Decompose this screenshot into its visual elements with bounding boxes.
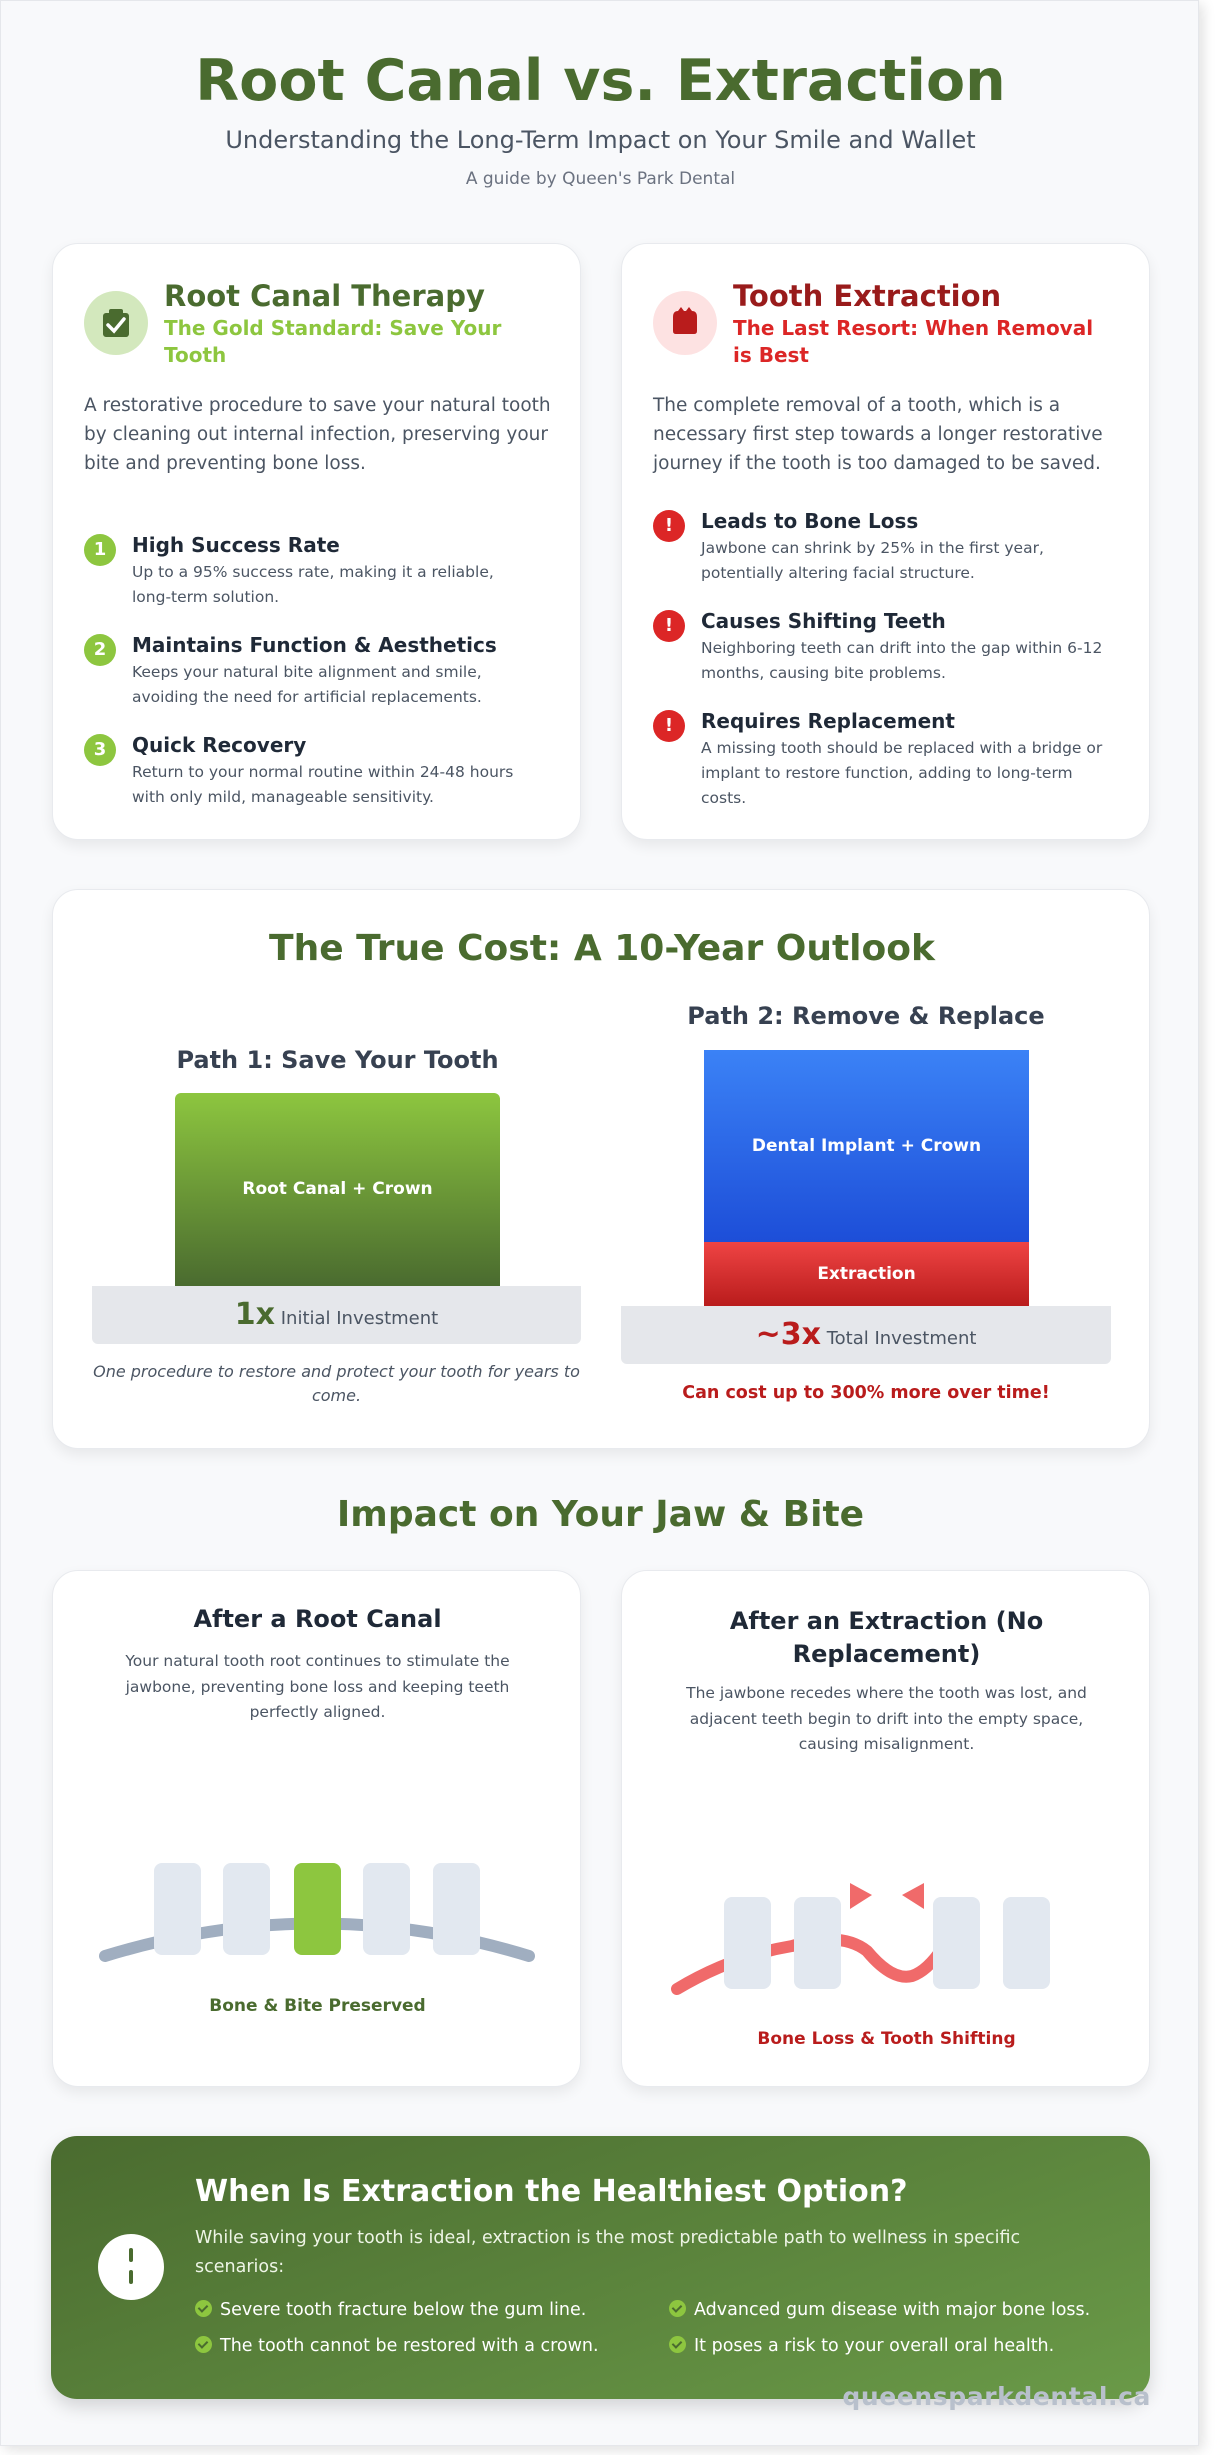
panel: after extraction <box>621 1570 1150 2087</box>
heading: Root Canal Therapy <box>164 279 485 313</box>
panel: root canal therapy <box>52 243 581 840</box>
checklist: Severe tooth fracture below the gum line. <box>220 2300 586 2320</box>
heading: Tooth <box>164 343 226 367</box>
base: 1x: 1x Initial Investment <box>235 1297 438 1332</box>
item 3 <box>653 709 1102 807</box>
path 2 title: Path 2: Remove & Replace <box>687 1002 1045 1030</box>
icon: alert <box>98 2234 164 2300</box>
bar: root canal + crown <box>175 1093 500 1286</box>
description: The complete removal of a tooth, which is a necessary first step towards a longer restorative journey if the tooth is too damaged to be saved. <box>653 395 1103 474</box>
risks list <box>653 509 1102 807</box>
panel: cost outlook <box>52 889 1150 1449</box>
heading: impact: Impact on Your Jaw & Bite <box>337 1494 864 1535</box>
checklist <box>195 2300 1090 2356</box>
item 3 <box>84 733 513 806</box>
base: 1x <box>92 1286 581 1344</box>
heading: Tooth Extraction <box>733 279 1001 313</box>
heading <box>733 279 1093 367</box>
heading: The True Cost: A 10-Year Outlook <box>269 928 935 969</box>
item 1: Jawbone can shrink by 25% in the first year, potentially altering facial structure. <box>701 539 1044 582</box>
text: While saving your tooth is ideal, extraction is the most predictable path to wellness in specific scenarios: <box>195 2228 1020 2277</box>
heading: Replacement) <box>793 1640 980 1668</box>
byline: A guide by Queen's Park Dental <box>466 169 735 189</box>
bar: root canal + crown: Root Canal + Crown <box>242 1179 433 1199</box>
title: Root Canal vs. Extraction <box>195 48 1006 114</box>
watermark: queensparkdental.ca <box>842 2382 1151 2411</box>
item 3: Return to your normal routine within 24-48 hours with only mild, manageable sensitivity. <box>132 763 513 806</box>
heading: When Is Extraction the Healthiest Option? <box>195 2174 908 2209</box>
item 1: Up to a 95% success rate, making it a reliable, long-term solution. <box>132 563 494 606</box>
item 1: 1 <box>94 539 106 560</box>
item 2: Neighboring teeth can drift into the gap within 6-12 months, causing bite problems. <box>701 639 1102 682</box>
item 2: 2 <box>94 639 106 660</box>
checklist: Advanced gum disease with major bone loss. <box>694 2300 1090 2320</box>
panel: when extraction is healthiest <box>51 2136 1150 2399</box>
checklist: The tooth cannot be restored with a crown. <box>220 2336 599 2356</box>
item 2 <box>653 609 1102 682</box>
label: Bone & Bite Preserved <box>209 1996 426 2016</box>
heading <box>730 1607 1043 1668</box>
item 2: ! <box>665 615 673 636</box>
item 3: Requires Replacement <box>701 709 955 733</box>
checklist: It poses a risk to your overall oral health. <box>694 2336 1054 2356</box>
label: Bone Loss & Tooth Shifting <box>757 2029 1016 2049</box>
panel: after root canal <box>52 1570 581 2087</box>
heading: The Last Resort: When Removal <box>733 316 1093 340</box>
item 1: High Success Rate <box>132 533 340 557</box>
description: Your natural tooth root continues to stimulate the jawbone, preventing bone loss and keeping teeth perfectly aligned. <box>125 1652 510 1721</box>
item 3: Quick Recovery <box>132 733 306 757</box>
icon: tooth <box>653 291 717 355</box>
item 1 <box>84 533 494 606</box>
heading: After an Extraction (No <box>730 1607 1043 1635</box>
heading: The Gold Standard: Save Your <box>164 316 501 340</box>
path 1 title: Path 1: Save Your Tooth <box>176 1046 499 1074</box>
item 2: Causes Shifting Teeth <box>701 609 946 633</box>
panel: tooth extraction <box>621 243 1150 840</box>
item 1 <box>653 509 1044 582</box>
item 1: Leads to Bone Loss <box>701 509 918 533</box>
description: The jawbone recedes where the tooth was lost, and adjacent teeth begin to drift into the empty space, causing misalignment. <box>686 1684 1087 1753</box>
illustration: preserved jaw <box>99 1863 535 1962</box>
heading <box>164 279 502 367</box>
item 2 <box>84 633 497 706</box>
subtitle: Understanding the Long-Term Impact on Your Smile and Wallet <box>225 126 976 154</box>
item 3: A missing tooth should be replaced with a bridge or implant to restore function, adding to long-term costs. <box>701 739 1102 807</box>
description: A restorative procedure to save your natural tooth by cleaning out internal infection, preserving your bite and preventing bone loss. <box>84 395 551 474</box>
item 2: Keeps your natural bite alignment and smile, avoiding the need for artificial replacements. <box>132 663 482 706</box>
icon: clipboard check <box>84 291 148 355</box>
bar: implant + crown: Dental Implant + Crown <box>752 1136 981 1156</box>
heading: is Best <box>733 343 809 367</box>
base: 3x: ~3x Total Investment <box>756 1317 976 1352</box>
caption path 2: Can cost up to 300% more over time! <box>682 1383 1050 1403</box>
bar: implant + crown <box>704 1050 1029 1242</box>
illustration: bone loss <box>671 1883 1050 1995</box>
item 3: 3 <box>94 739 106 760</box>
item 3: ! <box>665 715 673 736</box>
benefits list <box>84 533 513 806</box>
base: 3x <box>621 1306 1111 1364</box>
bar: extraction <box>704 1242 1029 1306</box>
item 1: ! <box>665 515 673 536</box>
heading: After a Root Canal <box>193 1605 442 1633</box>
caption path 1: One procedure to restore and protect your tooth for years to come. <box>93 1362 580 1405</box>
bar: extraction: Extraction <box>817 1264 916 1284</box>
item 2: Maintains Function & Aesthetics <box>132 633 497 657</box>
